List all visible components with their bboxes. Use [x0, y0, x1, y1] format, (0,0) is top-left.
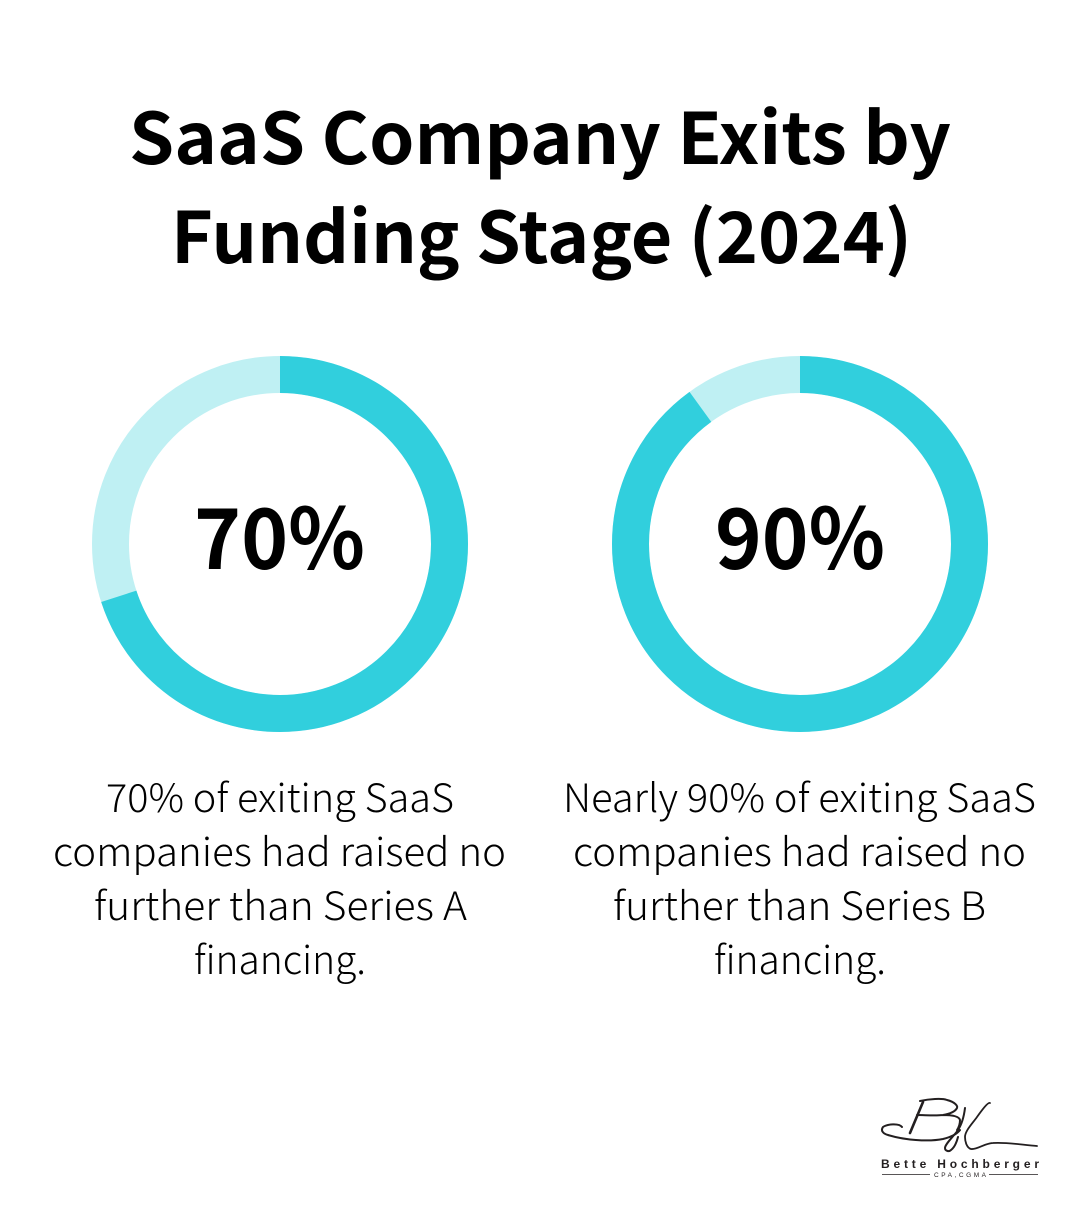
text block: Series A description: further than Series A: [94, 876, 467, 932]
text block: Series A description: 70% of exiting SaaS: [106, 768, 454, 824]
text block: Series A description: companies had raised no: [53, 822, 506, 878]
title: SaaS Company Exits by: [129, 83, 951, 185]
icon: BH monogram: [882, 1099, 1037, 1151]
text block: Series A description: financing.: [194, 930, 366, 986]
logo: Bette Hochberger signature: [881, 1099, 1039, 1179]
text: logo credentials: CPA,CGMA: [934, 1172, 987, 1179]
text block: Series B description: Nearly 90% of exiting SaaS: [563, 768, 1036, 824]
panel: 70 percent Series A: [53, 374, 506, 986]
donut chart: 70%: [110, 374, 450, 714]
text block: Series B description: [563, 768, 1036, 986]
title: Funding Stage (2024): [171, 182, 912, 284]
title: [129, 83, 951, 284]
donut chart: 90%: [630, 374, 970, 714]
text block: Series B description: companies had raised no: [573, 822, 1026, 878]
text block: Series A description: [53, 768, 506, 986]
value: 70%: 70%: [194, 473, 365, 594]
text block: Series B description: further than Series B: [613, 876, 986, 932]
text block: Series B description: financing.: [714, 930, 886, 986]
text: logo name: Bette Hochberger: [881, 1157, 1039, 1171]
value: 90%: 90%: [715, 473, 885, 594]
panel: 90 percent Series B: [563, 374, 1036, 986]
